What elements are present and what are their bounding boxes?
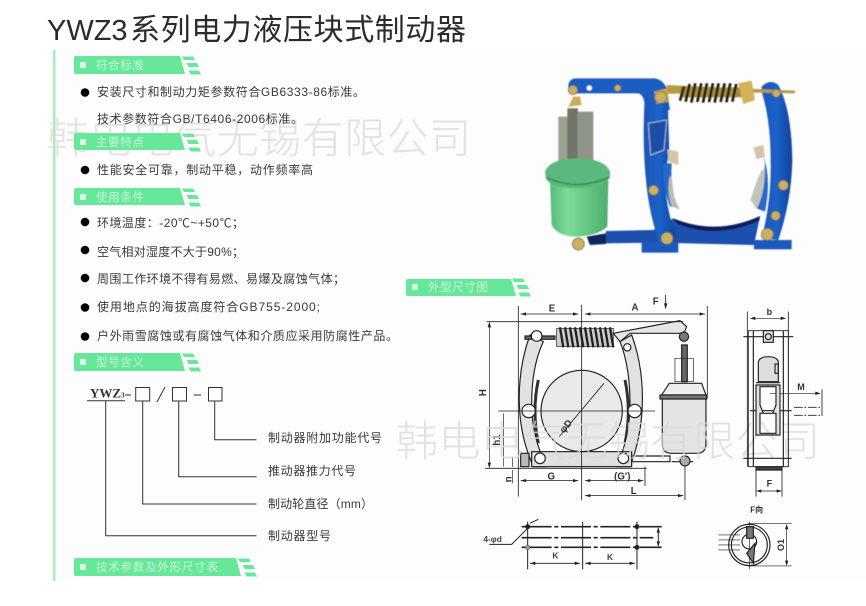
- product photo: hydraulic brake: [545, 78, 795, 253]
- model code diagram: 制动器型号: [268, 529, 331, 543]
- drawing: mounting hole plan: K: [552, 551, 558, 561]
- drawing: front elevation: n: [504, 476, 515, 482]
- drawing: front elevation: E: [549, 304, 556, 315]
- heading: standards: [74, 56, 201, 74]
- heading: technical parameters: [74, 558, 257, 576]
- model code diagram: 制动轮直径（mm）: [268, 497, 373, 511]
- panel: features: [74, 133, 313, 177]
- model code diagram: 制动器附加功能代号: [268, 431, 382, 445]
- bullet text: humidity: 空气相对湿度不大于90%；: [97, 244, 244, 259]
- drawing: front elevation: (G'): [614, 471, 630, 482]
- panel: standards: [74, 56, 365, 126]
- panel: operating conditions: [74, 188, 398, 343]
- bullet text: temperature: 环境温度：-20℃~+50℃；: [97, 215, 244, 230]
- heading: features: 主要特点: [96, 135, 144, 149]
- panel: model meaning: [74, 353, 382, 543]
- drawing: mounting hole plan: [483, 519, 662, 569]
- drawing: side elevation: [743, 307, 822, 551]
- drawing: front elevation: φD: [558, 418, 575, 436]
- title: 系列电力液压块式制动器: [130, 14, 466, 47]
- drawing: front elevation: h1: [492, 434, 503, 446]
- drawing: side elevation: M: [797, 382, 805, 392]
- heading: outline dimension drawing: 外型尺寸图: [428, 280, 488, 294]
- heading: model meaning: 型号含义: [96, 355, 144, 369]
- drawing: front elevation: G: [548, 471, 555, 482]
- model code diagram: YWZ3: [90, 386, 125, 400]
- heading: outline dimension drawing: [406, 278, 531, 296]
- bullet text: corrosion: 户外雨雪腐蚀或有腐蚀气体和介质应采用防腐性产品。: [97, 328, 398, 343]
- title: YWZ3: [47, 15, 128, 47]
- watermark: upper: 韩电电气无锡有限公司: [47, 105, 471, 166]
- drawing: side elevation: F向: [750, 505, 763, 515]
- drawing: front elevation: [478, 295, 707, 500]
- left accent rule: [53, 50, 56, 581]
- heading: model meaning: [74, 353, 201, 372]
- drawing: mounting hole plan: K: [607, 552, 613, 562]
- model code diagram: 推动器推力代号: [268, 464, 356, 478]
- heading: features: [74, 133, 201, 152]
- model code diagram: [87, 386, 382, 543]
- drawing: mounting hole plan: 4-φd: [483, 534, 502, 544]
- drawing: F direction view: [718, 522, 792, 569]
- bullet text: standards line 1: 安装尺寸和制动力矩参数符合GB6333-86标准。: [97, 84, 365, 99]
- bullet text: environment: 周围工作环境不得有易燃、易爆及腐蚀气体；: [97, 271, 345, 286]
- drawing: side elevation: b: [767, 307, 773, 317]
- bullet text: altitude: 使用地点的海拔高度符合GB755-2000;: [97, 299, 320, 314]
- heading: technical parameters: 技术参数及外形尺寸表: [96, 560, 218, 574]
- text: standards line 2: 技术参数符合GB/T6406-2006标准。: [97, 111, 303, 126]
- bullet text: features: 性能安全可靠，制动平稳，动作频率高: [97, 162, 313, 177]
- drawing: front elevation: H: [478, 389, 489, 396]
- drawing: front elevation: L: [631, 486, 637, 497]
- drawing: side elevation: F: [767, 479, 773, 489]
- heading: standards: 符合标准: [96, 58, 144, 72]
- watermark: lower: 韩电电气无锡有限公司: [396, 408, 820, 469]
- drawing: front elevation: F: [653, 296, 659, 307]
- drawing: side elevation: O1: [776, 539, 786, 551]
- heading: operating conditions: 使用条件: [96, 190, 144, 204]
- drawing: front elevation: A: [631, 303, 638, 314]
- heading: operating conditions: [74, 188, 201, 206]
